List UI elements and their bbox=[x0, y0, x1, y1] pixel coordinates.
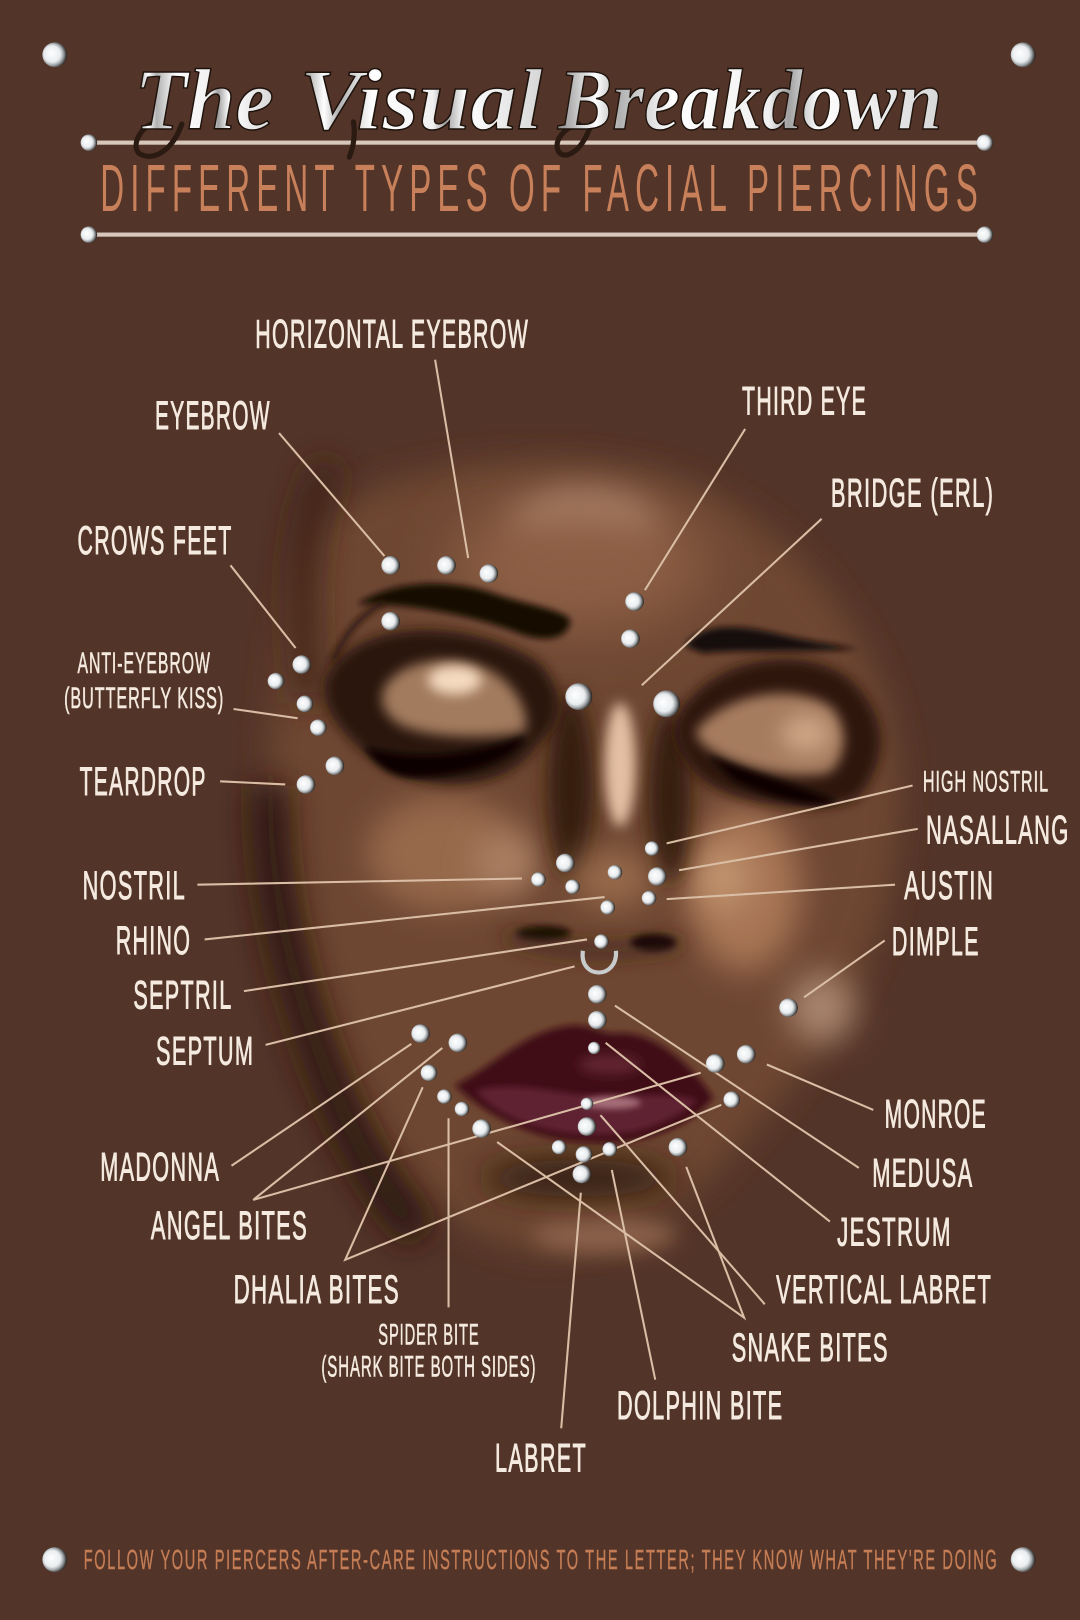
title text: Visual bbox=[300, 52, 543, 148]
right eye bbox=[675, 659, 881, 807]
piercing studs: nose bbox=[531, 841, 667, 949]
corner stud top left bbox=[42, 42, 67, 67]
nose shading bbox=[506, 692, 690, 951]
label: anti-eyebrow bbox=[64, 647, 224, 715]
label: dhalia bites: DHALIA BITES bbox=[234, 1267, 400, 1312]
label: anti-eyebrow: (BUTTERFLY KISS) bbox=[64, 682, 224, 715]
label: jestrum: JESTRUM bbox=[837, 1209, 952, 1254]
eyebrows bbox=[333, 584, 858, 661]
label: rhino: RHINO bbox=[116, 918, 191, 963]
label: septum: SEPTUM bbox=[156, 1029, 254, 1074]
label: labret: LABRET bbox=[495, 1436, 587, 1481]
label: snake bites: SNAKE BITES bbox=[732, 1325, 889, 1370]
title text bbox=[134, 52, 943, 148]
label: spider bite: SPIDER BITE bbox=[378, 1319, 480, 1352]
lips bbox=[455, 1025, 713, 1143]
label: teardrop: TEARDROP bbox=[80, 759, 207, 804]
leader lines bbox=[197, 360, 918, 1428]
corner stud bottom left bbox=[42, 1547, 67, 1572]
piercing studs: temple and cheek bbox=[268, 655, 344, 794]
illustration: face bbox=[270, 461, 900, 1254]
label: austin: AUSTIN bbox=[904, 863, 994, 908]
corner stud bottom right bbox=[1011, 1547, 1036, 1572]
label: spider bite bbox=[321, 1319, 536, 1384]
piercing studs: bridge bbox=[565, 683, 680, 717]
label: third eye: THIRD EYE bbox=[742, 378, 867, 423]
label: monroe: MONROE bbox=[885, 1092, 987, 1137]
label: anti-eyebrow: ANTI-EYEBROW bbox=[78, 647, 211, 680]
label: eyebrow: EYEBROW bbox=[155, 393, 271, 438]
header bar lower bbox=[81, 226, 993, 243]
left eye bbox=[325, 630, 559, 784]
title bbox=[134, 52, 943, 157]
label: septril: SEPTRIL bbox=[133, 973, 233, 1018]
label: horizontal eyebrow: HORIZONTAL EYEBROW bbox=[255, 311, 529, 356]
label: angel bites: ANGEL BITES bbox=[151, 1203, 308, 1248]
title text: Breakdown bbox=[557, 52, 943, 148]
piercing studs: brow and third eye bbox=[381, 556, 644, 648]
piercing studs: right of mouth bbox=[706, 998, 798, 1108]
label: spider bite: (SHARK BITE BOTH SIDES) bbox=[321, 1351, 536, 1384]
label: nostril: NOSTRIL bbox=[83, 863, 186, 908]
label: medusa: MEDUSA bbox=[872, 1150, 974, 1195]
title swashes bbox=[136, 122, 591, 157]
label: madonna: MADONNA bbox=[100, 1144, 220, 1189]
corner stud top right bbox=[1011, 42, 1036, 67]
septum ring bbox=[583, 951, 616, 973]
label: crows feet: CROWS FEET bbox=[78, 518, 233, 563]
label: dolphin bite: DOLPHIN BITE bbox=[617, 1383, 783, 1428]
header bar upper bbox=[81, 134, 993, 151]
label: dimple: DIMPLE bbox=[892, 919, 980, 964]
piercing studs: philtrum and lips bbox=[552, 985, 687, 1183]
title text: The bbox=[134, 52, 274, 148]
piercing studs: left of mouth bbox=[411, 1024, 491, 1138]
